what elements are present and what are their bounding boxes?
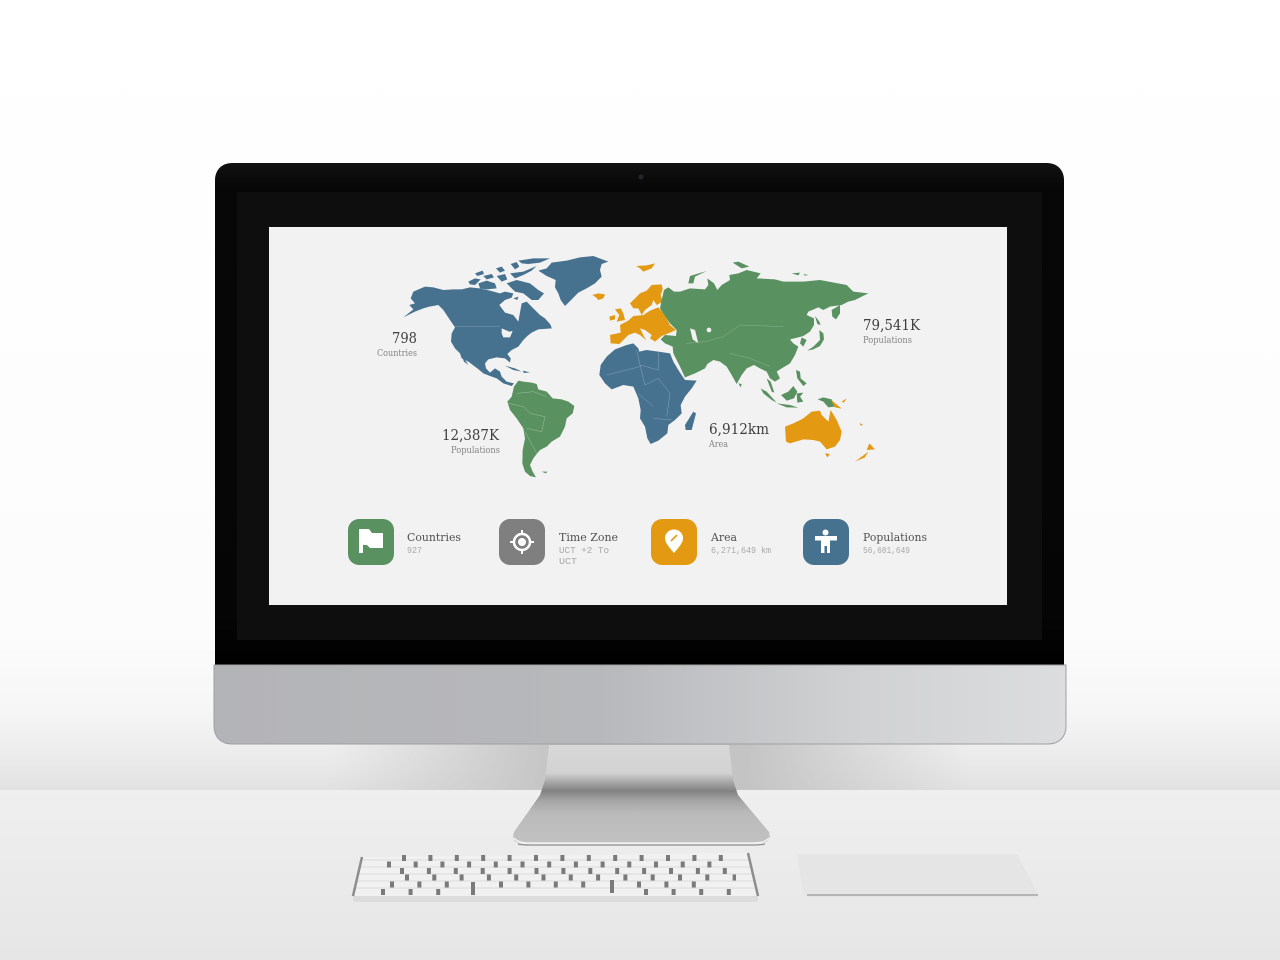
world map: [403, 256, 875, 477]
map: Oceania: [785, 398, 875, 462]
screen panel: [269, 227, 1007, 605]
map: North America and Greenland: [403, 256, 608, 386]
callout: 798 countries: [377, 331, 417, 359]
monitor bezel: [215, 163, 1064, 665]
label: time zone: Time Zone: [559, 530, 618, 544]
trackpad: [797, 854, 1038, 897]
map: Iceland: [592, 293, 605, 300]
icon: person: [803, 519, 849, 565]
label: area: Area: [710, 530, 737, 544]
icon: flag: [348, 519, 394, 565]
callout: 798 countries: Countries: [377, 349, 417, 359]
label: area: 6,271,649 km: [711, 545, 771, 556]
monitor inner panel: [237, 192, 1042, 640]
map: South America: [507, 381, 574, 477]
legend item: area: [651, 519, 771, 565]
background: desk: [0, 790, 1280, 960]
monitor camera: [638, 174, 644, 180]
callout: 79,541K populations: Populations: [863, 336, 912, 346]
callout: 12,387K populations: 12,387K: [442, 428, 500, 444]
label: area: [710, 530, 771, 556]
map: Asia: [660, 262, 868, 408]
icon: map pin: [651, 519, 697, 565]
label: populations: Populations: [863, 530, 927, 544]
legend item: populations: [803, 519, 927, 565]
callout: 12,387K populations: Populations: [451, 446, 500, 456]
legend item: countries: [348, 519, 461, 565]
label: countries: Countries: [407, 530, 461, 544]
callout: 6,912km area: Area: [708, 440, 729, 450]
callout: 798 countries: 798: [392, 331, 417, 347]
callout: 12,387K populations: [442, 428, 500, 456]
label: time zone: UCT +2 To: [559, 545, 609, 556]
callout: 79,541K populations: 79,541K: [863, 318, 921, 334]
callout: 79,541K populations: [863, 318, 921, 346]
label: time zone: [559, 530, 618, 567]
callout: 6,912km area: 6,912km: [709, 422, 769, 438]
map: Africa: [599, 343, 697, 444]
monitor body: [214, 163, 1066, 744]
label: countries: 927: [407, 545, 422, 556]
legend item: time zone: [499, 519, 618, 567]
callout: 6,912km area: [708, 422, 769, 450]
monitor shadow on wall: [330, 744, 970, 790]
label: populations: [863, 530, 927, 556]
label: time zone: UCT: [559, 556, 577, 567]
monitor stand: [513, 745, 770, 845]
label: populations: 56,681,649: [863, 545, 910, 556]
map: Europe: [609, 263, 676, 344]
monitor chin: [214, 665, 1066, 744]
label: countries: [407, 530, 461, 556]
icon: target: [499, 519, 545, 565]
keyboard: [353, 853, 758, 902]
